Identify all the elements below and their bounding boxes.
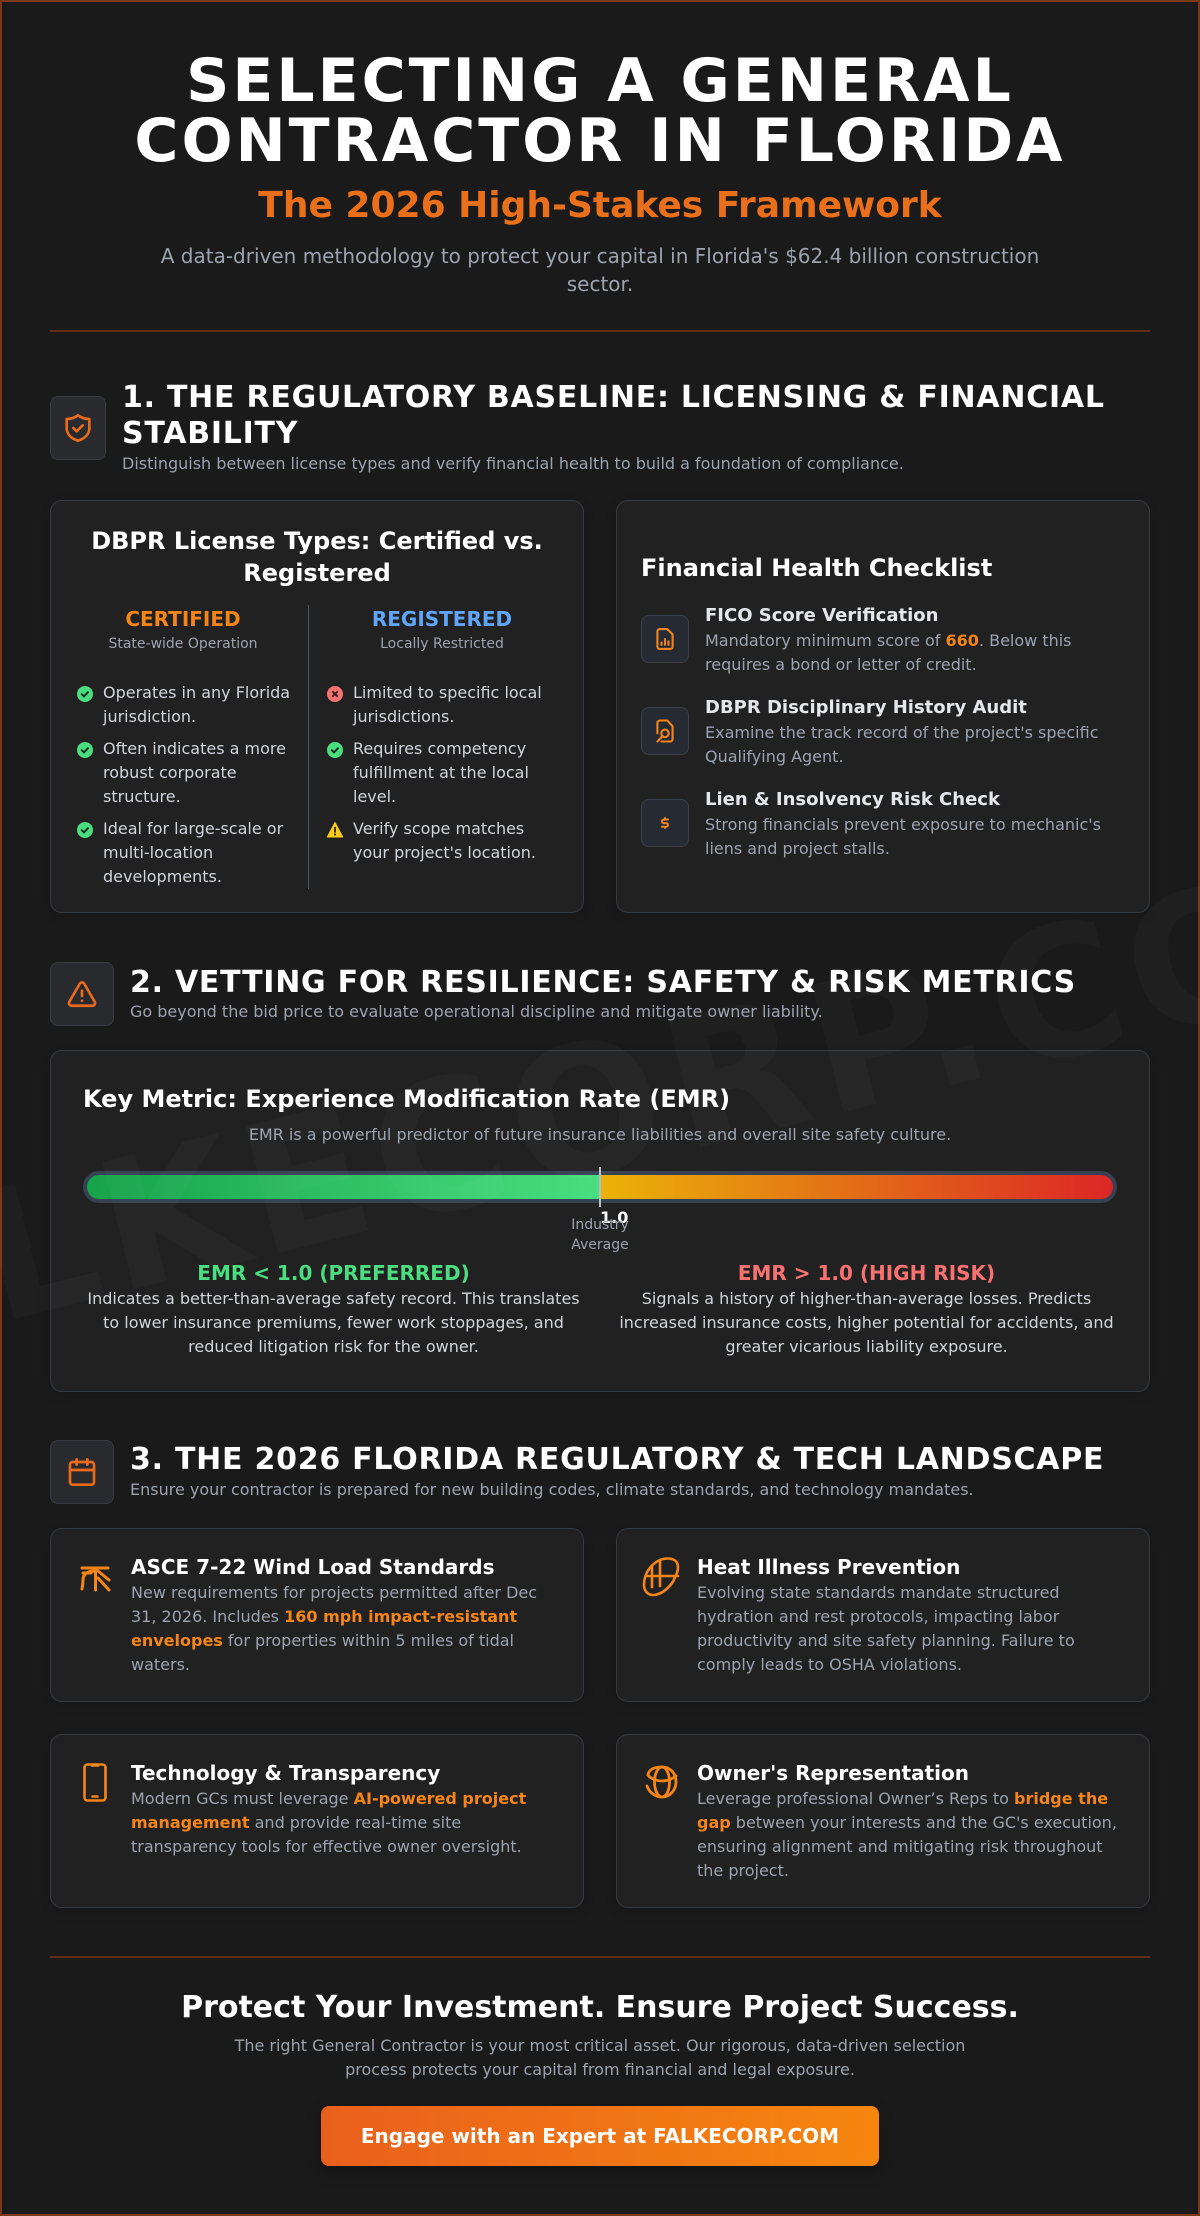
card: wind load: [50, 1528, 584, 1702]
checklist item: DBPR audit: Qualifying Agent.: [705, 747, 844, 766]
icon: file chart: [641, 615, 689, 663]
card text: hydration and rest protocols, impacting labor: [697, 1607, 1059, 1626]
column: certified: State-wide Operation: [108, 636, 258, 652]
card text: Evolving state standards mandate structured: [697, 1583, 1060, 1602]
section 1 description: Distinguish between license types and verify financial health to build a foundation of compliance.: [122, 454, 904, 473]
card text: productivity and site safety planning. Failure to: [697, 1631, 1075, 1650]
call to action button: Engage with an Expert at FALKECORP.COM: [361, 2124, 839, 2148]
column: certified: CERTIFIED: [125, 607, 241, 631]
column: registered: Limited to specific local: [353, 683, 542, 702]
card text: New requirements for projects permitted after Dec: [131, 1583, 537, 1602]
column: registered: Requires competency: [353, 739, 526, 758]
high risk column: Signals a history of higher-than-average losses. Predicts: [642, 1289, 1091, 1308]
checklist item: DBPR audit: DBPR Disciplinary History Audit: [705, 697, 1027, 718]
card title: Technology & Transparency: [131, 1761, 440, 1785]
title: [134, 46, 1066, 176]
card title: Owner's Representation: [697, 1761, 969, 1785]
column: registered: Verify scope matches: [353, 819, 524, 838]
metric description: EMR is a powerful predictor of future insurance liabilities and overall site safety culture.: [249, 1125, 951, 1144]
checklist item: lien risk: [641, 789, 1101, 858]
card text: Modern GCs must leverage AI-powered project: [131, 1789, 526, 1808]
panel: financial health checklist: [616, 500, 1150, 913]
panel: EMR key metric: [50, 1050, 1150, 1392]
subtitle: The 2026 High-Stakes Framework: [258, 185, 942, 226]
section 1 heading: STABILITY: [122, 416, 298, 451]
column: registered: jurisdictions.: [353, 707, 454, 726]
column: certified: developments.: [103, 867, 222, 886]
section 2 description: Go beyond the bid price to evaluate operational discipline and mitigate owner liability.: [130, 1002, 823, 1021]
icon: dollar: [641, 799, 689, 847]
section 3 heading: 3. THE 2026 FLORIDA REGULATORY & TECH LANDSCAPE: [130, 1442, 1104, 1477]
preferred column: reduced litigation risk for the owner.: [188, 1337, 479, 1356]
high risk column: increased insurance costs, higher potential for accidents, and: [619, 1313, 1114, 1332]
icon: heat: [642, 1557, 680, 1596]
high risk column: greater vicarious liability exposure.: [725, 1337, 1008, 1356]
column: registered: fulfillment at the local: [353, 763, 529, 782]
checklist item: lien risk: Lien & Insolvency Risk Check: [705, 789, 1000, 810]
card text: transparency tools for effective owner oversight.: [131, 1837, 522, 1856]
column: certified: Often indicates a more: [103, 739, 286, 758]
column: registered: your project's location.: [353, 843, 536, 862]
icon: smartphone: [83, 1763, 107, 1802]
panel: DBPR license types: [50, 500, 584, 913]
card title: ASCE 7-22 Wind Load Standards: [131, 1555, 494, 1579]
section 3 description: Ensure your contractor is prepared for new building codes, climate standards, and technology mandates.: [130, 1480, 974, 1499]
section 1 icon: shield: [50, 396, 106, 460]
checklist item: FICO: requires a bond or letter of credit.: [705, 655, 977, 674]
section 2 icon: warning triangle: [50, 962, 114, 1026]
section 1 heading: 1. THE REGULATORY BASELINE: LICENSING & FINANCIAL: [122, 380, 1105, 415]
high risk column: EMR > 1.0 (HIGH RISK): [738, 1261, 995, 1285]
column: certified: jurisdiction.: [103, 707, 196, 726]
card text: 31, 2026. Includes 160 mph impact-resistant: [131, 1607, 517, 1626]
card title: Heat Illness Prevention: [697, 1555, 960, 1579]
footer text: [234, 2036, 965, 2079]
column: registered: [326, 607, 542, 862]
card text: envelopes for properties within 5 miles of tidal: [131, 1631, 514, 1650]
card text: gap between your interests and the GC's execution,: [697, 1813, 1117, 1832]
checklist item: FICO: FICO Score Verification: [705, 605, 938, 626]
preferred column: Indicates a better-than-average safety record. This translates: [87, 1289, 580, 1308]
marker label: Average: [571, 1237, 629, 1253]
panel title: Key Metric: Experience Modification Rate (EMR): [83, 1085, 730, 1113]
panel title: Financial Health Checklist: [641, 554, 992, 582]
industry average marker: [599, 1167, 601, 1207]
card text: the project.: [697, 1861, 789, 1880]
card text: [131, 1789, 526, 1856]
card: owner's representation: [616, 1734, 1150, 1908]
marker value: 1.0: [600, 1208, 628, 1227]
card: heat illness: [616, 1528, 1150, 1702]
preferred column: EMR < 1.0 (PREFERRED): [197, 1261, 470, 1285]
icon: wind: [80, 1566, 111, 1592]
column: certified: [75, 605, 309, 889]
card text: comply leads to OSHA violations.: [697, 1655, 962, 1674]
card text: ensuring alignment and mitigating risk throughout: [697, 1837, 1103, 1856]
column: certified: Operates in any Florida: [103, 683, 290, 702]
title: CONTRACTOR IN FLORIDA: [134, 106, 1066, 176]
column: certified: Ideal for large-scale or: [103, 819, 283, 838]
preferred column: to lower insurance premiums, fewer work stoppages, and: [103, 1313, 564, 1332]
column: registered: REGISTERED: [372, 607, 512, 631]
checklist item: DBPR audit: Examine the track record of the project's specific: [705, 723, 1098, 742]
card text: [697, 1583, 1075, 1674]
card: technology: [50, 1734, 584, 1908]
column: certified: robust corporate: [103, 763, 237, 782]
column: certified: structure.: [103, 787, 181, 806]
card text: Leverage professional Owner’s Reps to bridge the: [697, 1789, 1108, 1808]
section 3 icon: calendar: [50, 1440, 114, 1504]
panel title: DBPR License Types: Certified vs.: [91, 527, 543, 555]
checklist item: DBPR audit: [641, 697, 1098, 766]
icon: globe: [646, 1766, 678, 1798]
EMR gradient bar: [83, 1171, 1117, 1203]
panel title: Registered: [243, 559, 391, 587]
section 1 heading: [122, 380, 1105, 451]
marker label: Industry: [571, 1217, 629, 1233]
call to action button: [321, 2106, 879, 2166]
checklist item: FICO: [641, 605, 1072, 674]
footer text: The right General Contractor is your most critical asset. Our rigorous, data-driven selection: [235, 2036, 965, 2055]
preferred column: [87, 1261, 580, 1356]
card text: [131, 1583, 537, 1674]
checklist item: lien risk: liens and project stalls.: [705, 839, 890, 858]
footer text: process protects your capital from financial and legal exposure.: [345, 2060, 855, 2079]
marker label: [571, 1217, 629, 1253]
checklist item: FICO: Mandatory minimum score of 660. Below this: [705, 631, 1072, 650]
license comparison columns: [77, 605, 542, 889]
card text: management and provide real-time site: [131, 1813, 461, 1832]
footer heading: Protect Your Investment. Ensure Project Success.: [181, 1990, 1019, 2025]
intro text: A data-driven methodology to protect your capital in Florida's $62.4 billion construction: [161, 244, 1039, 268]
intro text: sector.: [567, 272, 633, 296]
intro text: [161, 244, 1039, 296]
panel title: [91, 527, 543, 587]
card text: [697, 1789, 1117, 1880]
high risk column: [619, 1261, 1114, 1356]
checklist item: lien risk: Strong financials prevent exposure to mechanic's: [705, 815, 1101, 834]
title: SELECTING A GENERAL: [186, 46, 1014, 116]
header: [134, 46, 1066, 296]
icon: file search: [641, 707, 689, 755]
column: certified: multi-location: [103, 843, 213, 862]
section 2 heading: 2. VETTING FOR RESILIENCE: SAFETY & RISK METRICS: [130, 965, 1076, 1000]
column: registered: Locally Restricted: [380, 636, 504, 652]
column: registered: level.: [353, 787, 396, 806]
card text: waters.: [131, 1655, 190, 1674]
